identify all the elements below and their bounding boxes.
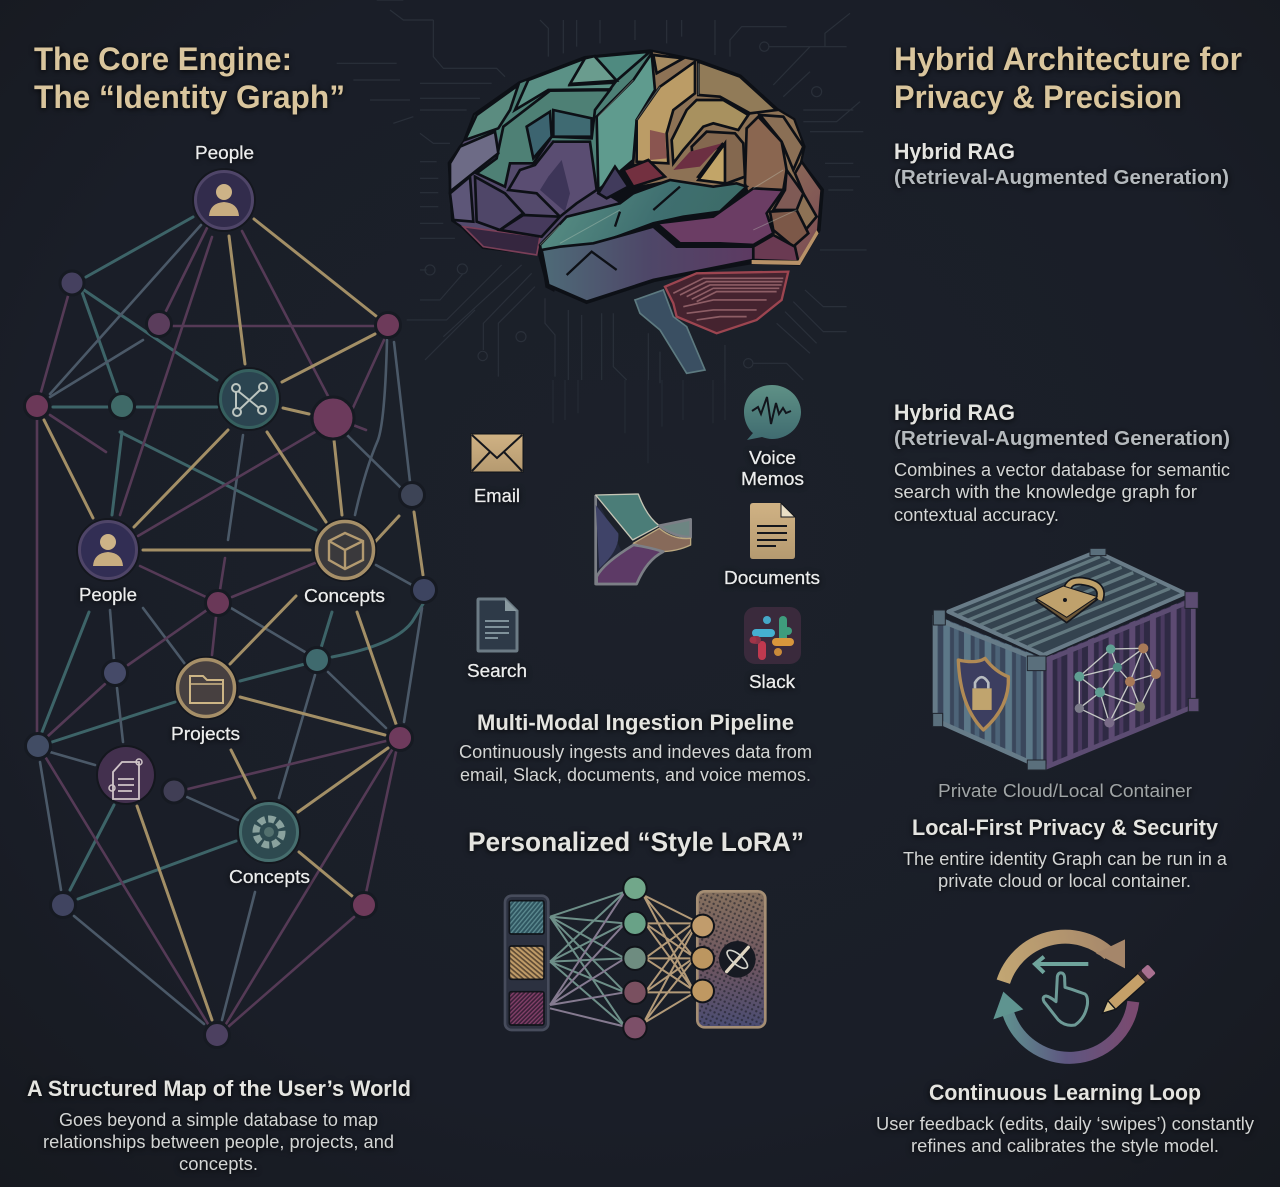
swipe arrow (1035, 957, 1088, 973)
node labels: People (79, 585, 137, 605)
icon: search document (478, 599, 517, 651)
text: learning loop (876, 1080, 1254, 1156)
text: structured map: relationships between people, projects, and (43, 1132, 394, 1152)
node labels: People (195, 143, 254, 163)
label: email: Email (474, 486, 520, 506)
bottom arc arrow (993, 992, 1133, 1058)
icon: continuous learning loop (993, 937, 1156, 1058)
node labels: Projects (171, 724, 240, 744)
title: hybrid architecture: Privacy & Precision (894, 79, 1182, 115)
container top (948, 552, 1185, 655)
title: the core engine: The “Identity Graph” (34, 79, 345, 115)
title: the core engine (34, 41, 345, 115)
label: slack: Slack (749, 672, 796, 692)
text: local-first privacy: The entire identity Graph can be run in a (903, 849, 1228, 869)
text: hybrid rag description: contextual accuracy. (894, 505, 1059, 525)
network links (550, 892, 693, 1027)
text: learning loop: User feedback (edits, daily ‘swipes’) constantly (876, 1114, 1254, 1134)
panel: identity graph (24, 143, 436, 1048)
text: learning loop: refines and calibrates the style model. (911, 1136, 1219, 1156)
icon: private container (933, 548, 1199, 770)
text: ingestion pipeline: Multi-Modal Ingestion Pipeline (477, 710, 794, 735)
label: voice memos: Voice (749, 448, 796, 468)
text: learning loop: Continuous Learning Loop (929, 1080, 1201, 1105)
graph edges (37, 217, 423, 1027)
graph small nodes (24, 271, 436, 1048)
padlock on lid (1036, 581, 1101, 623)
style symbol (719, 941, 756, 978)
title: hybrid architecture (894, 41, 1242, 115)
heading: hybrid rag top: (Retrieval-Augmented Generation) (894, 167, 1229, 189)
text: local-first privacy: Private Cloud/Local Container (938, 781, 1192, 801)
node: projects folder (174, 656, 238, 720)
text: local-first privacy: Local-First Privacy & Security (912, 815, 1219, 840)
label: voice memos: Memos (741, 469, 804, 489)
icon: voice memos (744, 385, 801, 440)
icon: brain (450, 52, 822, 373)
text: structured map: A Structured Map of the User’s World (27, 1076, 411, 1101)
node: document (96, 745, 156, 805)
heading: style lora: Personalized “Style LoRA” (468, 827, 804, 857)
title: hybrid architecture: Hybrid Architecture for (894, 41, 1242, 77)
text: structured map: concepts. (179, 1154, 258, 1174)
heading: hybrid rag top (894, 139, 1229, 189)
circuit traces behind brain (337, 0, 867, 463)
text: hybrid rag description: Hybrid RAG (894, 400, 1015, 425)
text: ingestion pipeline: Continuously ingests and indeves data from (459, 742, 812, 762)
container left side (935, 615, 1043, 768)
top arc arrow (1003, 937, 1125, 982)
text: hybrid rag description (894, 400, 1230, 525)
node: people left (76, 518, 140, 582)
node labels (79, 143, 385, 887)
text: local-first privacy (903, 781, 1228, 891)
text: hybrid rag description: Combines a vector database for semantic (894, 460, 1230, 480)
node: people top (192, 168, 256, 232)
shield (958, 658, 1008, 730)
node: concepts cube (313, 518, 377, 582)
icon: email (471, 434, 523, 472)
icon: documents (750, 503, 795, 559)
text: structured map: Goes beyond a simple database to map (59, 1110, 378, 1130)
output panel (697, 891, 765, 1027)
text: ingestion pipeline (459, 710, 812, 785)
icon: slack (744, 607, 801, 664)
node labels: Concepts (304, 586, 385, 606)
pencil (1098, 964, 1156, 1018)
icon: ingestion hub logo (596, 494, 691, 584)
text: local-first privacy: private cloud or local container. (938, 871, 1191, 891)
text: hybrid rag description: (Retrieval-Augmented Generation) (894, 428, 1230, 450)
label: voice memos (741, 448, 804, 489)
node: concepts gear (237, 800, 301, 864)
chart: style lora network (505, 877, 765, 1039)
hidden nodes (623, 877, 714, 1039)
network badge (1074, 643, 1161, 728)
label: documents: Documents (724, 568, 820, 588)
text: ingestion pipeline: email, Slack, documents, and voice memos. (460, 765, 811, 785)
hand (1043, 973, 1088, 1025)
corner posts (933, 548, 1199, 770)
input panel (505, 896, 548, 1030)
label: search: Search (467, 661, 527, 681)
text: hybrid rag description: search with the knowledge graph for (894, 482, 1197, 502)
container right side (1043, 597, 1193, 768)
title: the core engine: The Core Engine: (34, 41, 292, 77)
node labels: Concepts (229, 867, 310, 887)
node: hub (217, 367, 281, 431)
text: structured map (27, 1076, 411, 1174)
heading: hybrid rag top: Hybrid RAG (894, 139, 1015, 164)
